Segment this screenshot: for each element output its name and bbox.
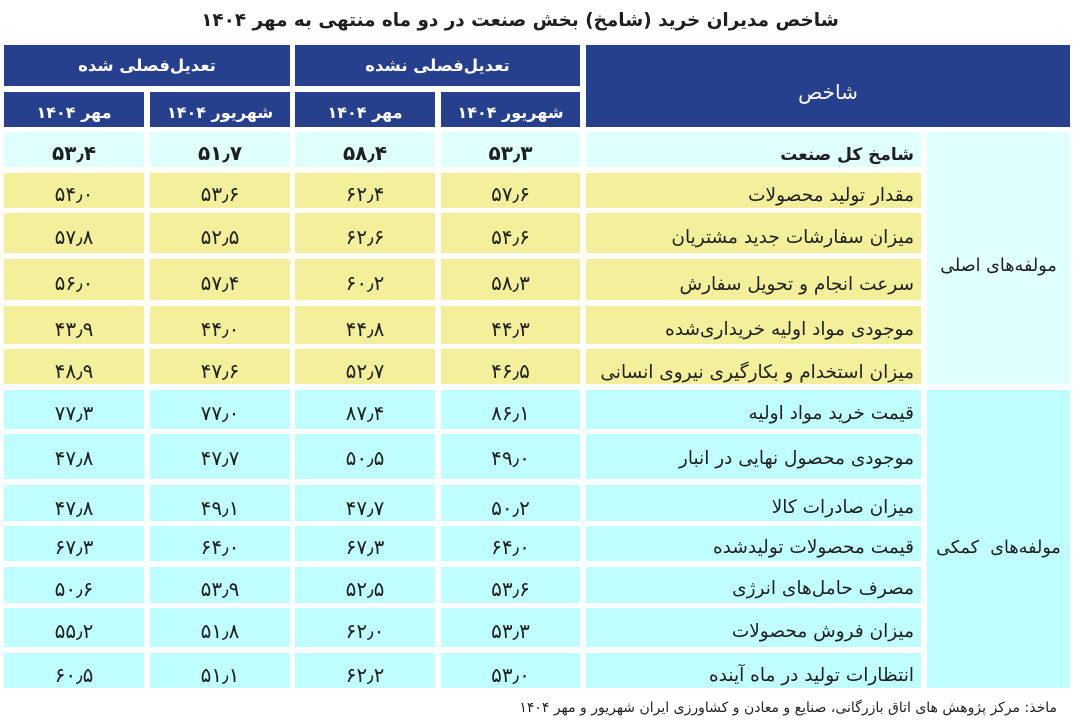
header: seasonally adjusted [4, 45, 290, 86]
row: production volume: ۵۴٫۰ [55, 182, 93, 206]
header: Shahrivar 1404 unadjusted: شهریور ۱۴۰۴ [457, 103, 564, 122]
row: exports: ۴۷٫۸ [55, 496, 93, 520]
row: exports: میزان صادرات کالا [772, 497, 914, 518]
row: raw material purchase price: ۷۷٫۰ [201, 401, 239, 425]
group panel: auxiliary components [927, 390, 1070, 688]
row: employment: ۴۸٫۹ [55, 359, 93, 383]
row: new customer orders: ۵۴٫۶ [491, 225, 530, 249]
header: Shahrivar 1404 adjusted: شهریور ۱۴۰۴ [167, 103, 273, 122]
row: purchased raw material inventory: ۴۴٫۰ [201, 317, 239, 341]
row: purchased raw material inventory [4, 306, 921, 344]
row: raw material purchase price: قیمت خرید مواد اولیه [748, 403, 914, 424]
row: energy consumption [4, 567, 921, 603]
row: output prices: قیمت محصولات تولیدشده [713, 537, 914, 558]
row: employment: ۴۶٫۵ [491, 359, 530, 383]
group panel: main components: مولفه‌های اصلی [940, 256, 1057, 276]
row: purchased raw material inventory: ۴۴٫۳ [491, 317, 530, 341]
row: next month production expectations: ۵۳٫۰ [491, 663, 530, 687]
row: next month production expectations [4, 653, 921, 688]
row: next month production expectations: ۶۲٫۲ [346, 663, 384, 687]
group panel: main components [927, 132, 1070, 384]
row: delivery speed: ۶۰٫۲ [346, 271, 384, 295]
row: finished goods inventory: ۴۷٫۸ [55, 446, 93, 470]
row: energy consumption: ۵۰٫۶ [55, 577, 93, 601]
row: delivery speed: ۵۷٫۴ [201, 271, 239, 295]
row: product sales: ۵۵٫۲ [55, 619, 93, 643]
row: production volume: ۵۳٫۶ [201, 182, 239, 206]
row: employment: ۵۲٫۷ [346, 359, 384, 383]
row: purchased raw material inventory: موجودی مواد اولیه خریداری‌شده [665, 319, 914, 340]
row: total industry index: ۵۸٫۴ [343, 141, 387, 165]
header: Shahrivar 1404 unadjusted [441, 92, 580, 127]
row: new customer orders: ۶۲٫۶ [346, 225, 384, 249]
row: purchased raw material inventory: ۴۴٫۸ [346, 317, 384, 341]
row: energy consumption: ۵۳٫۹ [201, 577, 239, 601]
source note: ماخذ: مرکز پژوهش های اتاق بازرگانی، صنایع و معادن و کشاورزی ایران شهریور و مهر ۱۴۰۴ [519, 700, 1057, 716]
row: exports: ۴۹٫۱ [201, 496, 239, 520]
row: product sales: ۶۲٫۰ [346, 619, 384, 643]
row: energy consumption: ۵۳٫۶ [491, 577, 530, 601]
row: delivery speed: ۵۸٫۳ [491, 271, 530, 295]
header: not seasonally adjusted: تعدیل‌فصلی نشده [365, 56, 510, 75]
group panel: auxiliary components: مولفه‌های کمکی [936, 538, 1061, 558]
row: finished goods inventory: ۴۷٫۷ [201, 446, 239, 470]
header: indicator [586, 45, 1070, 127]
row: delivery speed [4, 259, 921, 300]
row: energy consumption: ۵۲٫۵ [346, 577, 384, 601]
header: Mehr 1404 adjusted: مهر ۱۴۰۴ [36, 103, 112, 122]
row: finished goods inventory: ۴۹٫۰ [491, 446, 530, 470]
header: indicator: شاخص [798, 80, 858, 104]
row: output prices [4, 526, 921, 561]
row: new customer orders: میزان سفارشات جدید مشتریان [671, 227, 914, 248]
row: total industry index: ۵۱٫۷ [198, 141, 242, 165]
row: delivery speed: ۵۶٫۰ [55, 271, 93, 295]
row: total industry index [4, 132, 921, 167]
row: product sales [4, 608, 921, 647]
row: output prices: ۶۷٫۳ [55, 535, 93, 559]
row: product sales: ۵۱٫۸ [201, 619, 239, 643]
header: Mehr 1404 adjusted [4, 92, 144, 127]
row: new customer orders [4, 213, 921, 253]
row: raw material purchase price [4, 390, 921, 429]
header: Mehr 1404 unadjusted [295, 92, 435, 127]
row: next month production expectations: انتظارات تولید در ماه آینده [709, 665, 914, 686]
row: delivery speed: سرعت انجام و تحویل سفارش [679, 274, 914, 295]
row: production volume: ۶۲٫۴ [346, 182, 384, 206]
row: exports [4, 485, 921, 521]
title: شاخص مدیران خرید (شامخ) بخش صنعت در دو ماه منتهی به مهر ۱۴۰۴ [201, 10, 839, 31]
row: next month production expectations: ۶۰٫۵ [55, 663, 93, 687]
header: Mehr 1404 unadjusted: مهر ۱۴۰۴ [327, 103, 403, 122]
row: output prices: ۶۴٫۰ [201, 535, 239, 559]
row: total industry index: شامخ کل صنعت [780, 145, 914, 165]
row: output prices: ۶۷٫۳ [346, 535, 384, 559]
row: production volume [4, 173, 921, 208]
row: raw material purchase price: ۸۶٫۱ [491, 401, 530, 425]
row: new customer orders: ۵۲٫۵ [201, 225, 239, 249]
row: new customer orders: ۵۷٫۸ [55, 225, 93, 249]
row: next month production expectations: ۵۱٫۱ [201, 663, 239, 687]
row: purchased raw material inventory: ۴۳٫۹ [55, 317, 93, 341]
row: production volume: مقدار تولید محصولات [748, 185, 914, 206]
row: production volume: ۵۷٫۶ [491, 182, 530, 206]
row: total industry index: ۵۳٫۳ [488, 141, 533, 165]
row: product sales: میزان فروش محصولات [732, 621, 914, 642]
row: finished goods inventory: ۵۰٫۵ [346, 446, 384, 470]
row: energy consumption: مصرف حامل‌های انرژی [732, 578, 914, 599]
row: finished goods inventory: موجودی محصول نهایی در انبار [679, 448, 914, 469]
header: Shahrivar 1404 adjusted [150, 92, 290, 127]
header: seasonally adjusted: تعدیل‌فصلی شده [78, 56, 216, 75]
row: employment [4, 349, 921, 384]
row: output prices: ۶۴٫۰ [491, 535, 530, 559]
row: total industry index: ۵۳٫۴ [52, 141, 96, 165]
row: raw material purchase price: ۸۷٫۴ [346, 401, 384, 425]
row: employment: ۴۷٫۶ [201, 359, 239, 383]
row: product sales: ۵۳٫۳ [491, 619, 530, 643]
row: exports: ۵۰٫۲ [491, 496, 530, 520]
row: raw material purchase price: ۷۷٫۳ [55, 401, 93, 425]
row: finished goods inventory [4, 434, 921, 479]
row: exports: ۴۷٫۷ [346, 496, 384, 520]
header: not seasonally adjusted [295, 45, 580, 86]
row: employment: میزان استخدام و بکارگیری نیروی انسانی [600, 362, 914, 383]
